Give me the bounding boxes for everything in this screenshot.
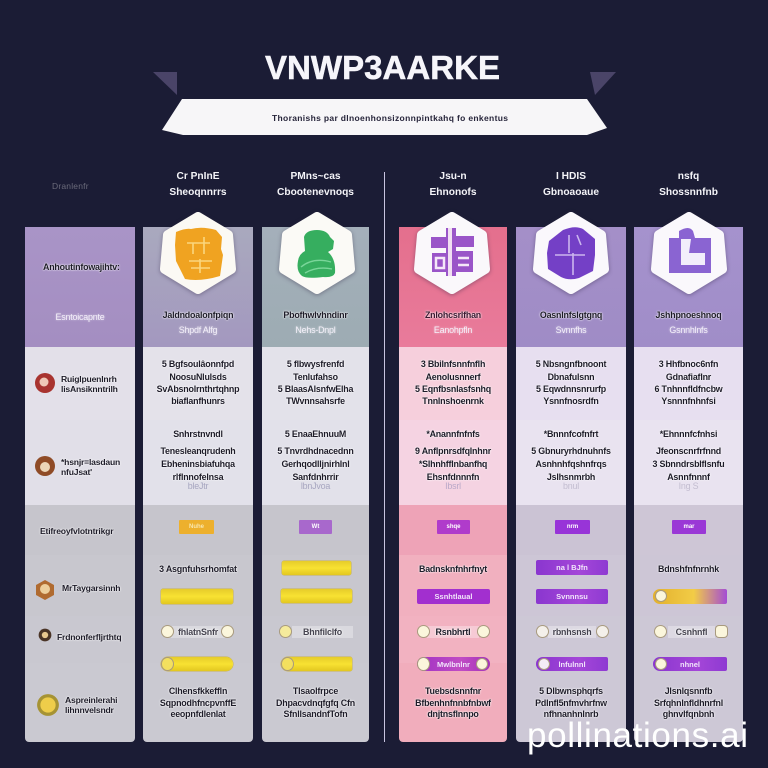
column 3 row 1: Tnnlnshoenrnk bbox=[422, 396, 484, 406]
purple bar top bbox=[536, 560, 608, 575]
magenta capsule bar bbox=[417, 657, 490, 671]
column 2 row 1 bbox=[262, 347, 369, 420]
column 1 row 2: Snhrstnvndl bbox=[173, 429, 223, 439]
magenta bar: Ssnhtlaual bbox=[435, 592, 472, 601]
column 4 title: I HDIS bbox=[556, 171, 586, 182]
column 2 row 2 bbox=[262, 420, 369, 505]
column 4 row 5: rbnhsnsh bbox=[553, 627, 591, 637]
label row 6 bbox=[25, 663, 135, 742]
column 4 header bbox=[516, 227, 626, 347]
subtitle banner: Thoranishs par dlnoenhonsizonnpintkahq fo enkentus bbox=[272, 113, 508, 123]
column 1 row 2: Tenesleanqrudenh bbox=[160, 446, 236, 456]
purple capsule bar bbox=[653, 657, 727, 671]
column 4 row 2: Asnhnhfqshnfrqs bbox=[536, 459, 606, 469]
column 4 row 6 bbox=[516, 663, 626, 742]
column 3 row 1 bbox=[399, 347, 507, 420]
column 5 row 2: Asnnfnnnf bbox=[667, 472, 710, 482]
column 3 row 6 bbox=[399, 663, 507, 742]
label row 1: lisAnsiknntrilh bbox=[61, 384, 118, 394]
column 5 row 2: *Ehnnnfcfnhsi bbox=[660, 429, 717, 439]
column 1 row 6: eeopnfdlenlat bbox=[170, 709, 226, 719]
column 4 row 3 bbox=[516, 505, 626, 555]
column 3 row 2: *Anannfnfnfs bbox=[426, 429, 480, 439]
column 1 row 1: 5 Bgfsoulâonnfpd bbox=[162, 359, 234, 369]
purple bar bottom: Svnnnsu bbox=[556, 592, 588, 601]
title: VNWP3AARKE bbox=[265, 49, 500, 86]
yellow capsule bar bbox=[161, 657, 233, 671]
subtitle banner bbox=[162, 99, 607, 135]
label row 3: Etifreoyfvlotntrikgr bbox=[40, 526, 113, 536]
purple capsule bar: lnfulnnl bbox=[558, 660, 586, 669]
column 5 row 5 bbox=[634, 616, 743, 663]
column 1 row 6: SqpnodhfncpvnffE bbox=[160, 698, 236, 708]
column 1 title: Cr PnInE bbox=[176, 171, 220, 182]
column 2 row 6: Tlsaolfrpce bbox=[293, 686, 338, 696]
purple badge: mar bbox=[683, 524, 694, 530]
label header block: Anhoutinfowajihtv: bbox=[43, 262, 120, 272]
label row 2: nfuJsat' bbox=[61, 467, 92, 477]
label row 6: lihnnvelsndr bbox=[65, 705, 114, 715]
column 4 subtitle: Gbnoaoaue bbox=[543, 187, 599, 198]
label row 4 bbox=[25, 555, 135, 616]
column 4 header: Svnnfhs bbox=[556, 325, 586, 335]
column 1 row 6 bbox=[143, 663, 253, 742]
yellow bar top bbox=[282, 561, 351, 575]
column 3 row 2 bbox=[399, 420, 507, 505]
column 4 row 2: 5 Gbnuryrhdnuhnfs bbox=[531, 446, 611, 456]
column 1 row 6: Clhensfkkeffln bbox=[169, 686, 227, 696]
magenta badge bbox=[437, 520, 470, 534]
column 5 row 2 bbox=[634, 420, 743, 505]
column 5 row 6: Jlsnlqsnnfb bbox=[665, 686, 712, 696]
column 5 row 4 bbox=[634, 555, 743, 616]
column 5 row 1: Gdnafiaflnr bbox=[666, 372, 711, 382]
label row 2: *hsnjr=lasdaun bbox=[61, 457, 120, 467]
icon: violet blob hexagon badge bbox=[531, 212, 611, 297]
column 3 row 4 bbox=[399, 555, 507, 616]
column 2 row 6: SfnllsandnfTofn bbox=[284, 709, 347, 719]
column 1 row 2 bbox=[143, 420, 253, 505]
column 3 row 6: Bfbenhnfnnbfnbwf bbox=[415, 698, 491, 708]
column 3 row 1: 5 Eqnfbsnlasfsnhq bbox=[415, 384, 491, 394]
column 2 row 1: TWvnnsahsrfe bbox=[286, 396, 345, 406]
column 2 header: Pbofhwlvhndinr bbox=[283, 310, 348, 320]
column 1 row 2: rlflnnofelnsa bbox=[173, 472, 223, 482]
column 2 row 5: Bhnfilclfo bbox=[303, 627, 342, 637]
column 3 header: Znlohcsrlfhan bbox=[425, 310, 481, 320]
column 3 row 1: 3 Bbilnfsnnfnflh bbox=[421, 359, 485, 369]
column 1 row 2: bleJtr bbox=[188, 481, 208, 491]
column 5 row 5: Csnhnfl bbox=[676, 627, 707, 637]
column 1 row 1: biaflanfhunrs bbox=[171, 396, 225, 406]
column 5 title: nsfq bbox=[678, 171, 699, 182]
column 5 row 1: Ysnnnfnhnfsi bbox=[661, 396, 716, 406]
yellow bar bottom bbox=[281, 589, 352, 603]
column 4 row 6: nfhnanhnlnrb bbox=[544, 709, 598, 719]
column 3 row 5: Rsnbhrtl bbox=[436, 627, 470, 637]
column 4 row 1: 5 Eqwdnnsnrurfp bbox=[536, 384, 606, 394]
column 4 row 1: Ysnnfnosrdfn bbox=[543, 396, 599, 406]
label row 3 bbox=[25, 505, 135, 555]
panel: row labels bbox=[25, 181, 135, 742]
column 2 row 4 bbox=[262, 555, 369, 616]
column 3 title: Jsu-n bbox=[439, 171, 467, 182]
column 3 row 1: Aenolusnnerf bbox=[426, 372, 480, 382]
column 1 row 3 bbox=[143, 505, 253, 555]
panel: column 2 green bbox=[262, 171, 369, 742]
column 5 header: Jshhpnoeshnoq bbox=[656, 310, 721, 320]
label heading: Dranlenfr bbox=[52, 181, 89, 191]
label row 1: Ruiglpuenlnrh bbox=[61, 374, 117, 384]
column 1 row 1: SvAbsnolrnthrtqhnp bbox=[157, 384, 239, 394]
column 2 header: Nehs-Dnpl bbox=[295, 325, 336, 335]
column 1 row 2: Ebheninsbiafuhqa bbox=[161, 459, 235, 469]
column 4 row 6: 5 Dlbwnsphqrfs bbox=[539, 686, 603, 696]
column 5 row 6 bbox=[634, 663, 743, 742]
label row 4: MrTaygarsinnh bbox=[62, 583, 120, 593]
column 3 row 2: Ehsnfdnnnfn bbox=[427, 472, 479, 482]
column 4 row 5 bbox=[516, 616, 626, 663]
column 2 row 1: 5 BlaasAlsnfwElha bbox=[278, 384, 353, 394]
yellow capsule bar bbox=[281, 657, 352, 671]
column 3 header: Eanohpfln bbox=[434, 325, 472, 335]
column 2 row 1: Tenlufahso bbox=[293, 372, 338, 382]
purple badge: nrm bbox=[567, 524, 578, 530]
column 4 row 2 bbox=[516, 420, 626, 505]
column 1 row 1 bbox=[143, 347, 253, 420]
purple capsule bar bbox=[536, 657, 608, 671]
magenta capsule bar: Mwlbnlnr bbox=[437, 660, 470, 669]
column 3 row 3 bbox=[399, 505, 507, 555]
purple badge bbox=[299, 520, 332, 534]
purple badge bbox=[672, 520, 706, 534]
column 3 row 2: *Slhnhfflnbanfhq bbox=[419, 459, 487, 469]
column 5 row 1 bbox=[634, 347, 743, 420]
column 3 row 4: Badnsknfnhrfnyt bbox=[419, 564, 487, 574]
purple badge: Wt bbox=[312, 524, 319, 530]
divider bbox=[384, 172, 385, 742]
column 3 row 6: dnjtnsflnnpo bbox=[427, 709, 479, 719]
purple bar top: na l BJfn bbox=[556, 563, 588, 572]
label row 2 bbox=[25, 420, 135, 505]
orange badge: Nuhe bbox=[189, 524, 204, 530]
icon: thumb hexagon badge bbox=[649, 212, 729, 297]
column 2 subtitle: Cbootenevnoqs bbox=[277, 187, 354, 198]
icon: purple columns hexagon badge bbox=[412, 212, 492, 297]
column 2 row 6 bbox=[262, 663, 369, 742]
column 3 row 5 bbox=[399, 616, 507, 663]
panel: column 3 pink bbox=[399, 171, 507, 742]
column 1 row 4 bbox=[143, 555, 253, 616]
column 2 row 3 bbox=[262, 505, 369, 555]
label header block: Esntoicapnte bbox=[56, 312, 104, 322]
column 4 row 2: Jslhsnmrbh bbox=[547, 472, 595, 482]
column 4 row 1: Dbnafulsnn bbox=[548, 372, 594, 382]
column 5 subtitle: Shossnnfnb bbox=[659, 187, 718, 198]
icon: green hexagon badge bbox=[277, 212, 357, 297]
column 4 row 1: 5 Nbsngnfbnoont bbox=[536, 359, 606, 369]
column 5 row 3 bbox=[634, 505, 743, 555]
ribbon tail: right bbox=[590, 72, 616, 95]
yellow bar bbox=[161, 589, 233, 604]
purple capsule bar: nhnel bbox=[680, 660, 700, 669]
column 4 row 2: bnul bbox=[563, 481, 579, 491]
column 3 row 2: Ibsrl bbox=[445, 481, 461, 491]
ribbon tail: left bbox=[153, 72, 177, 95]
magenta badge: shqe bbox=[446, 524, 460, 530]
label row 6: Aspreinlerahi bbox=[65, 695, 117, 705]
column 5 row 1: 3 Hhfbnoc6nfn bbox=[659, 359, 718, 369]
label row 1 bbox=[25, 347, 135, 420]
column 5 row 2: 3 Sbnndrsblflsnfu bbox=[652, 459, 725, 469]
label row 5: Frdnonferfljrthtq bbox=[57, 632, 121, 642]
purple bar bottom bbox=[536, 589, 608, 604]
column 1 header: Jaldndoalonfpiqn bbox=[163, 310, 233, 320]
column 2 row 2: Sanfdnhrrir bbox=[292, 472, 339, 482]
column 5 row 1: 6 Tnhnnfldfncbw bbox=[654, 384, 722, 394]
column 5 row 6: ghnvlfqnbnh bbox=[663, 709, 714, 719]
column 4 row 1 bbox=[516, 347, 626, 420]
column 2 row 5 bbox=[262, 616, 369, 663]
column 1 row 5: fhlatnSnfr bbox=[178, 627, 218, 637]
column 1 row 1: NoosuNlulsds bbox=[169, 372, 227, 382]
column 2 row 2: 5 EnaaEhnuuM bbox=[285, 429, 346, 439]
column 1 subtitle: Sheoqnnrrs bbox=[169, 187, 227, 198]
column 4 row 2: *Bnnnfcofnfrt bbox=[544, 429, 598, 439]
column 5 row 2: Ing S bbox=[679, 481, 698, 491]
column 5 row 2: Jfeonscnrfrfnnd bbox=[656, 446, 721, 456]
column 2 title: PMns~cas bbox=[290, 171, 341, 182]
column 1 row 4: 3 Asgnfuhsrhomfat bbox=[159, 564, 237, 574]
column 3 row 6: Tuebsdsnnfnr bbox=[425, 686, 481, 696]
watermark: pollinations.ai bbox=[527, 716, 748, 755]
column 2 header bbox=[262, 227, 369, 347]
orange badge bbox=[179, 520, 214, 534]
column 2 row 2: Gerhqodlljnirhlnl bbox=[281, 459, 350, 469]
column 2 row 2: lbnJvoa bbox=[301, 481, 330, 491]
column 4 header: Oasnlnfslgtgnq bbox=[540, 310, 602, 320]
panel: column 1 orange bbox=[143, 171, 253, 742]
column 5 header: Gsnnhlnfs bbox=[669, 325, 708, 335]
label header block bbox=[25, 227, 135, 347]
column 5 row 4: Bdnshfnfnrnhk bbox=[658, 564, 719, 574]
panel: column 5 lilac bbox=[634, 171, 743, 742]
column 4 row 4 bbox=[516, 555, 626, 616]
label row 5 bbox=[25, 616, 135, 663]
icon: orange hexagon badge bbox=[158, 212, 238, 296]
column 3 row 2: 9 Anflpnrsdfqlnhnr bbox=[415, 446, 491, 456]
column 1 header bbox=[143, 227, 253, 347]
column 5 header bbox=[634, 227, 743, 347]
column 3 subtitle: Ehnonofs bbox=[430, 187, 476, 198]
column 2 row 1: 5 flbwysfrenfd bbox=[287, 359, 344, 369]
panel: column 4 violet bbox=[516, 171, 626, 742]
column 1 header: Shpdf Alfg bbox=[179, 325, 217, 335]
purple badge bbox=[555, 520, 590, 534]
column 2 row 6: Dhpacvdnqfgfq Cfn bbox=[276, 698, 355, 708]
yellow to purple bar bbox=[653, 589, 727, 604]
column 2 row 2: 5 Tnvrdhdnacednn bbox=[277, 446, 354, 456]
column 5 row 6: Srfqhnlnfldhnrfnl bbox=[654, 698, 723, 708]
column 1 row 5 bbox=[143, 616, 253, 663]
magenta bar bbox=[417, 589, 490, 604]
column 3 header bbox=[399, 227, 507, 347]
column 4 row 6: Pdlnfl5nfmvhrfnw bbox=[535, 698, 607, 708]
